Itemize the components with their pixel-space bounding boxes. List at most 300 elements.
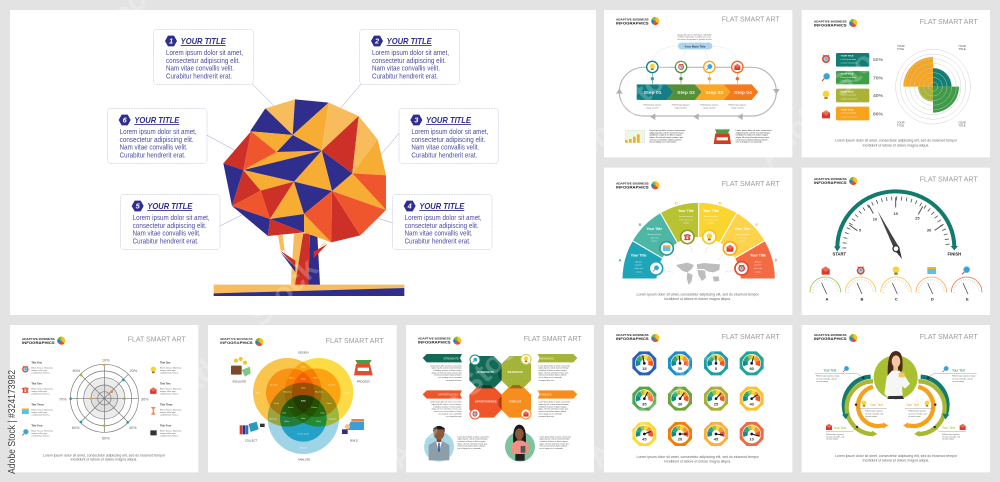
venn circles — [253, 358, 353, 454]
gauge row 1: 5 — [715, 366, 718, 371]
middle callouts: Your Text — [906, 403, 919, 407]
small gauges — [810, 277, 982, 294]
panel: radar chart — [10, 325, 198, 472]
dotted arrows — [664, 246, 733, 272]
icon: bar chart — [625, 130, 645, 143]
callout 2: YOUR TITLE — [387, 36, 432, 46]
banner text blocks: adipiscing elit, sed do eiusmod tempor — [431, 367, 462, 370]
corner labels: YOUR — [958, 44, 966, 48]
right list: tempus, tellus eget — [160, 411, 176, 414]
arc arrows — [842, 377, 949, 437]
segment text: tortor sed — [738, 236, 746, 239]
step captions: neque sit amet — [675, 106, 687, 109]
woman text: aliqua. Ut enim ad minim veniam, quis — [539, 442, 570, 445]
world map — [676, 263, 720, 285]
caption: incididunt ut labore et dolore magna aliqua. — [664, 459, 731, 463]
right list: Etiam rhoncus. Maecenas — [160, 387, 182, 390]
panel: semicircle segments — [604, 168, 792, 315]
title rows: Lorem ipsum dolor — [841, 113, 856, 115]
left list: Title Four — [31, 424, 43, 427]
header: FLAT SMART ART — [722, 17, 780, 24]
man text: nostrud exercitation ullamco laboris — [457, 445, 485, 448]
callout 3 — [399, 108, 499, 163]
middle callouts: sit amet convallis, sed — [908, 412, 927, 415]
radar labels: 60% — [72, 426, 80, 430]
main title pill: Your Main Title — [684, 44, 706, 48]
banner text blocks: aliqua. Ut enim ad minim veniam, quis — [432, 371, 462, 374]
segment text: cursus — [740, 241, 745, 243]
small gauge letters — [826, 297, 969, 302]
title rows: Lorem ipsum dolor — [841, 95, 856, 97]
venn labels: Data — [282, 412, 287, 415]
middle callouts: Pellentesque egestas — [908, 410, 926, 413]
icon: calendar — [342, 419, 364, 434]
top callouts: sit amet neque — [816, 380, 828, 383]
venn labels: Ea amet — [270, 383, 278, 386]
top callouts — [815, 366, 977, 383]
right list: tempus, tellus eget — [160, 369, 176, 372]
small gauge icons — [822, 266, 970, 275]
title rows — [822, 53, 884, 120]
gauge row 3: 20 — [678, 437, 683, 442]
panel: SWOT — [406, 325, 594, 472]
text block left: incididunt ut labore et dolore magna — [649, 134, 682, 137]
header — [616, 181, 780, 189]
callout 3: consectetur adipiscing elit. — [411, 137, 485, 144]
step captions: Pellentesque egestas — [672, 104, 690, 107]
callout 3: Lorem ipsum dolor sit amet, — [411, 129, 488, 136]
gauge ticks — [844, 197, 948, 248]
callout 2: Lorem ipsum dolor sit amet, — [372, 50, 449, 57]
gauge row 3: 45 — [714, 437, 719, 442]
banner text blocks: consequat duis aute — [446, 379, 462, 382]
left list: Etiam rhoncus. Maecenas — [31, 387, 53, 390]
venn category labels: BUILD — [350, 438, 358, 442]
segment text: Your Title — [646, 227, 662, 231]
header: FLAT SMART ART — [722, 334, 780, 341]
text block left: aliqua. Ut enim ad minim veniam, quis — [649, 136, 683, 139]
watermark: Adobe Stock — [582, 322, 735, 475]
banners: OPPORTUNITIES — [438, 394, 459, 397]
header: INFOGRAPHICS — [616, 337, 649, 341]
title rows: 40% — [873, 93, 884, 99]
icon: folders — [240, 422, 265, 434]
callout 4: consectetur adipiscing elit. — [405, 223, 479, 230]
icon: wallet and coins — [231, 357, 251, 377]
callout 5 — [120, 194, 220, 249]
caption: Lorem ipsum dolor sit amet, consectetur adipiscing elit, sed do eiusmod tempor — [835, 139, 958, 143]
callout 5: 5 — [136, 202, 141, 211]
bottom callouts: Your Text — [942, 426, 955, 430]
man text — [457, 435, 489, 450]
segment text: Your Title — [631, 253, 647, 257]
header: ADAPTIVE BUSINESS — [220, 337, 253, 341]
semicircle segments — [622, 202, 775, 279]
swot labels — [475, 370, 523, 403]
woman text — [539, 435, 571, 450]
venn category labels: ANALYSE — [298, 457, 310, 461]
callout 6: Curabitur hendrerit erat. — [120, 153, 186, 160]
left list: condimentum rhoncus — [31, 393, 50, 396]
header: INFOGRAPHICS — [814, 337, 847, 341]
segment text: feugiat — [683, 222, 689, 225]
corner labels: TITLE — [897, 47, 905, 51]
right list: tempus, tellus eget — [160, 390, 176, 393]
top callouts: Your Text — [952, 368, 965, 372]
caption: Lorem ipsum dolor sit amet, consectetur adipiscing elit, sed do eiusmod tempor — [43, 453, 166, 457]
bottom callouts: Pellentesque egestas — [942, 433, 960, 436]
gauge numbers: 5 — [859, 227, 862, 232]
step arrows — [637, 84, 758, 100]
text block right: aliqua. Ut enim ad minim veniam, quis — [736, 136, 769, 139]
title rows: YOUR TITLE — [841, 56, 854, 58]
title rows: YOUR TITLE — [841, 91, 854, 93]
radar labels: 40% — [129, 426, 137, 430]
gauge row 2: 35 — [642, 401, 647, 406]
right list: Title One — [160, 361, 171, 364]
venn labels: Tellus — [284, 421, 289, 423]
callout 6: 6 — [123, 116, 128, 125]
venn labels: Data — [321, 412, 326, 415]
middle callouts — [855, 401, 936, 418]
radar labels: 50% — [102, 436, 110, 440]
caption: incididunt ut labore et dolore magna aliqua. — [664, 297, 731, 301]
panel: gauge grid — [604, 325, 792, 472]
callout 1: Nam vitae convallis velit. — [166, 66, 234, 73]
banner text blocks: aliqua. Ut enim ad minim veniam, quis — [538, 371, 569, 374]
middle callouts: sit amet neque — [865, 415, 877, 418]
corner labels — [897, 44, 966, 128]
radar labels: 80% — [72, 369, 81, 373]
segment text: tortor sed cursus — [704, 218, 718, 221]
callout 4: Nam vitae convallis velit. — [405, 231, 473, 238]
left list: tempus, tellus eget — [31, 432, 47, 435]
header — [22, 337, 186, 345]
segment text: tortor sed — [650, 236, 658, 239]
woman text: Lorem ipsum dolor sit amet, consectetur — [539, 435, 571, 438]
left list: condimentum rhoncus — [31, 372, 50, 375]
segment text: posuere — [635, 265, 642, 267]
caption — [637, 293, 760, 301]
banner text blocks: incididunt ut labore et dolore magna — [538, 369, 567, 372]
callout 4 — [392, 194, 492, 249]
callout 1: Curabitur hendrerit erat. — [166, 74, 232, 81]
segment text: Aenean — [635, 260, 642, 263]
banners — [423, 354, 577, 399]
callout 4: Curabitur hendrerit erat. — [405, 239, 471, 246]
header: ADAPTIVE BUSINESS — [814, 19, 847, 23]
callout 6 — [107, 108, 207, 163]
right list: Title Four — [160, 424, 171, 427]
segment letters: E — [755, 222, 758, 227]
callout 1 — [154, 29, 253, 84]
panel: tree infographic — [10, 10, 596, 315]
callout 5: Lorem ipsum dolor sit amet, — [133, 215, 210, 222]
panel: step process — [604, 10, 792, 157]
venn labels: Dolor — [301, 386, 306, 389]
watermark: Adobe Stock — [752, 22, 905, 175]
leader lines — [207, 83, 399, 226]
gauge numbers: 10 — [873, 217, 878, 222]
venn labels: Dolor — [345, 391, 350, 394]
swot labels: OPPORTUNITIES — [475, 399, 497, 403]
callout 5: Nam vitae convallis velit. — [133, 231, 201, 238]
callout 3: Curabitur hendrerit erat. — [411, 153, 477, 160]
step captions: Pellentesque egestas — [700, 104, 718, 107]
left list: Etiam rhoncus. Maecenas — [31, 429, 53, 432]
banner text blocks: adipiscing elit, sed do eiusmod tempor — [538, 403, 569, 406]
gauge row 3: 10 — [749, 437, 755, 442]
main title pill — [677, 34, 712, 49]
callout 5: consectetur adipiscing elit. — [133, 223, 207, 230]
banner text blocks: aliqua. Ut enim ad minim veniam, quis — [538, 408, 569, 411]
left list: Title One — [31, 361, 43, 364]
woman text: incididunt ut labore et dolore magna — [539, 440, 568, 443]
radar labels: 30% — [141, 397, 149, 401]
callout 2 — [360, 29, 459, 84]
text block right: incididunt ut labore et dolore magna — [736, 134, 769, 137]
needle — [878, 211, 902, 259]
segment text: posuere — [755, 265, 761, 267]
step captions — [643, 104, 746, 109]
banners: THREATS — [540, 394, 552, 397]
banner text blocks: nisi ut aliquip ex ea commodo — [538, 412, 562, 415]
title rows: sit amet consectetur — [841, 97, 858, 100]
racetrack arrows — [616, 67, 780, 120]
banner text blocks: adipiscing elit, sed do eiusmod tempor — [431, 403, 462, 406]
gauge row 2: 25 — [714, 401, 719, 406]
small gauge letters: B — [861, 297, 864, 302]
callout 3: Nam vitae convallis velit. — [411, 145, 479, 152]
man text: nisi ut aliquip ex ea commodo — [457, 447, 481, 450]
right list: Title Three — [160, 403, 173, 406]
text block right: Lorem ipsum dolor sit amet, consectetur — [736, 129, 772, 132]
middle callouts: sit amet convallis, sed — [865, 412, 883, 415]
venn category labels: PROCESS — [357, 379, 370, 383]
banner text blocks: Lorem ipsum dolor sit amet, consectetur — [430, 401, 462, 404]
header — [418, 336, 582, 345]
ground — [214, 285, 404, 296]
venn labels — [256, 366, 350, 449]
header — [616, 17, 780, 25]
callout 1: Lorem ipsum dolor sit amet, — [166, 50, 243, 57]
radar labels: 70% — [59, 397, 67, 401]
banners: WEAKNESS — [540, 357, 554, 360]
title rows: 50% — [873, 57, 884, 63]
venn labels: Dolor — [274, 402, 279, 405]
banner text blocks: adipiscing elit, sed do eiusmod tempor — [538, 367, 569, 370]
man text: adipiscing elit, sed do eiusmod tempor — [457, 438, 488, 441]
start and finish labels — [833, 252, 961, 257]
banners: STRENGHTS — [443, 357, 459, 360]
header: ADAPTIVE BUSINESS — [814, 177, 847, 181]
caption: incididunt ut labore et dolore magna aliqua. — [71, 458, 137, 462]
swot labels: THREATS — [509, 399, 521, 403]
radar chart — [69, 364, 138, 432]
header: INFOGRAPHICS — [616, 21, 649, 25]
text block right: nisi ut aliquip ex ea commodo. — [736, 141, 763, 144]
header: ADAPTIVE BUSINESS — [616, 17, 649, 21]
woman avatar — [505, 425, 535, 462]
banner text blocks: Lorem ipsum dolor sit amet, consectetur — [538, 401, 570, 404]
venn labels: Dolor — [301, 377, 306, 380]
venn labels: Maximus — [269, 419, 277, 421]
venn labels: Dolor — [256, 391, 261, 394]
header: ADAPTIVE BUSINESS — [22, 337, 55, 341]
header — [616, 333, 780, 342]
radar labels: 20% — [129, 369, 138, 373]
title rows: 70% — [873, 75, 884, 81]
left list: Etiam rhoncus. Maecenas — [31, 366, 53, 369]
step captions: neque sit amet — [731, 106, 744, 109]
title rows: sit amet consectetur — [841, 80, 858, 83]
segment text: tortor sed — [754, 267, 762, 270]
banner text blocks: consequat duis aute — [538, 415, 554, 418]
header: FLAT SMART ART — [524, 336, 582, 343]
caption: incididunt ut labore et dolore magna aliqua. — [863, 458, 929, 462]
small gauge letters: E — [966, 297, 969, 302]
top callouts: sit amet neque — [952, 380, 964, 383]
left list — [22, 361, 53, 438]
woman text: nostrud exercitation ullamco laboris — [539, 445, 567, 448]
step arrows: Step 02 — [677, 90, 695, 96]
panel: speedometer — [802, 168, 990, 315]
top callouts: Pellentesque egestas neque — [952, 375, 975, 378]
header: INFOGRAPHICS — [22, 341, 55, 345]
panel: venn diagram — [208, 325, 397, 472]
venn labels: Ea amet — [328, 383, 336, 386]
middle callouts: Pellentesque egestas — [865, 410, 883, 413]
venn labels: Maximus — [315, 391, 323, 393]
step icons — [647, 61, 743, 84]
right list: Title Two — [160, 382, 171, 385]
gauge row 1: 60 — [749, 366, 755, 371]
venn labels: Maximus — [329, 419, 337, 421]
title rows: YOUR TITLE — [841, 109, 854, 111]
text block right: nostrud exercitation ullamco laboris — [736, 138, 768, 141]
left list: tempus, tellus eget — [31, 369, 47, 372]
title rows: 80% — [873, 111, 884, 117]
banner text blocks: aliqua. Ut enim ad minim veniam, quis — [432, 408, 462, 411]
banner text blocks: consequat duis aute — [538, 379, 554, 382]
title rows: sit amet consectetur — [841, 115, 858, 118]
venn labels: Fusce — [312, 407, 318, 409]
step captions: neque sit amet — [646, 106, 659, 109]
left list: tempus, tellus eget — [31, 411, 47, 414]
callout 6: Nam vitae convallis velit. — [120, 145, 188, 152]
callout 2: consectetur adipiscing elit. — [372, 58, 446, 65]
segment icons — [649, 230, 748, 275]
callout 1: YOUR TITLE — [181, 36, 226, 46]
segment text: Your Title — [734, 227, 750, 231]
swot labels: STRENGHTS — [477, 370, 494, 374]
corner labels: YOUR — [958, 121, 966, 125]
banner text blocks: incididunt ut labore et dolore magna — [433, 369, 462, 372]
gauge row 3: 45 — [642, 437, 647, 442]
step arrows: Step 01 — [644, 90, 662, 96]
segment text: cursus — [652, 241, 657, 243]
callout 1: 1 — [169, 37, 173, 46]
woman text: adipiscing elit, sed do eiusmod tempor — [539, 438, 570, 441]
start and finish labels: FINISH — [948, 252, 961, 257]
swot icons — [470, 354, 531, 419]
icon: money bag — [714, 129, 731, 144]
icon: money bag — [354, 360, 373, 375]
banner text blocks: nisi ut aliquip ex ea commodo — [538, 376, 562, 379]
venn labels: Dolor — [301, 366, 306, 369]
polar chart — [896, 49, 970, 124]
small gauge letters: D — [931, 297, 934, 302]
text block left: adipiscing elit, sed do eiusmod tempor — [649, 131, 684, 134]
header: FLAT SMART ART — [920, 177, 978, 184]
text block right: adipiscing elit, sed do eiusmod tempor — [736, 131, 770, 134]
callout 2: Curabitur hendrerit erat. — [372, 74, 438, 81]
banner text blocks — [430, 364, 570, 418]
caption — [835, 139, 958, 147]
venn labels: IDEA — [301, 400, 306, 403]
segment text: Aenean — [755, 260, 761, 263]
main title pill: accumsan id imperdiet et, porttitor at sem. — [677, 38, 712, 41]
right list: Etiam rhoncus. Maecenas — [160, 429, 182, 432]
right list: Etiam rhoncus. Maecenas — [160, 408, 182, 411]
callout 4: Lorem ipsum dolor sit amet, — [405, 215, 482, 222]
corner labels: TITLE — [958, 47, 966, 51]
presenter — [874, 351, 918, 399]
gauge numbers: 30 — [927, 228, 932, 233]
right list — [150, 361, 182, 438]
header: FLAT SMART ART — [920, 334, 978, 341]
left list: tempus, tellus eget — [31, 390, 47, 393]
caption: Lorem ipsum dolor sit amet, consectetur adipiscing elit, sed do eiusmod tempor — [637, 293, 760, 297]
title rows: Lorem ipsum dolor — [841, 77, 856, 79]
banner text blocks: incididunt ut labore et dolore magna — [433, 405, 462, 408]
header: INFOGRAPHICS — [814, 23, 847, 27]
banner text blocks: Lorem ipsum dolor sit amet, consectetur — [430, 364, 462, 367]
venn labels: Fusce — [288, 407, 294, 409]
radar labels — [59, 358, 149, 440]
dotted connectors — [652, 46, 737, 61]
left list: condimentum rhoncus — [31, 435, 50, 438]
header: FLAT SMART ART — [920, 19, 978, 26]
segment text: tortor sed — [635, 267, 643, 270]
gauge row 2: 40 — [749, 401, 755, 406]
segment text: Your Title — [750, 253, 766, 257]
segment letters — [619, 200, 778, 263]
callout 3: 3 — [414, 116, 418, 125]
bottom callouts — [826, 424, 966, 441]
header: INFOGRAPHICS — [418, 340, 451, 344]
segment text — [631, 209, 766, 273]
start and finish labels: START — [833, 252, 847, 257]
left list: Title Three — [31, 403, 44, 406]
text block left — [649, 129, 686, 144]
segment text: feugiat — [708, 222, 714, 225]
gauge row 1 — [632, 351, 764, 375]
venn category labels: DESIGN — [298, 351, 309, 355]
venn labels: Sit amet — [300, 446, 307, 449]
callout 6: consectetur adipiscing elit. — [120, 137, 194, 144]
bottom callouts: Pellentesque egestas — [826, 433, 844, 436]
venn labels: Dolor — [327, 402, 332, 405]
swot octagons — [469, 356, 531, 418]
venn labels: Tellus — [316, 421, 321, 423]
caption: Lorem ipsum dolor sit amet, consectetur adipiscing elit, sed do eiusmod tempor — [835, 454, 958, 458]
step captions: Pellentesque egestas — [728, 104, 746, 107]
big gauge arc — [834, 191, 958, 252]
header: ADAPTIVE BUSINESS — [616, 333, 649, 337]
small gauge letters: C — [895, 297, 898, 302]
caption — [637, 455, 760, 463]
